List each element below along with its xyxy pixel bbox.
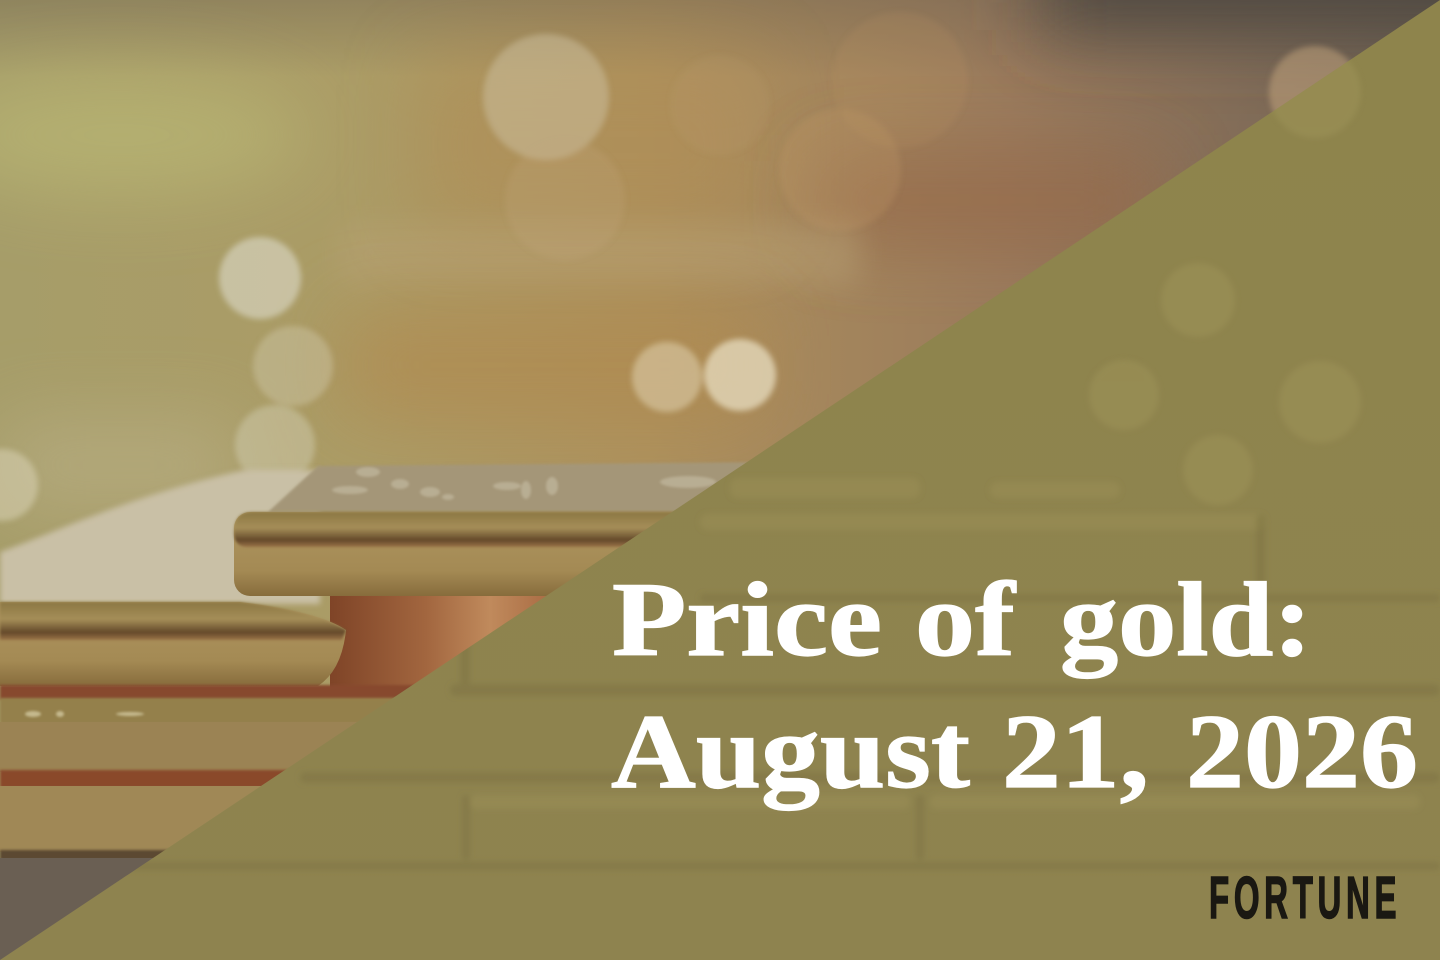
table foreground <box>0 858 320 960</box>
ghosted bokeh <box>1096 72 1354 498</box>
title line 1 <box>612 561 1312 678</box>
top bar surface <box>268 462 780 512</box>
third bar rim <box>0 698 480 724</box>
top bar body <box>234 512 794 596</box>
bar shadow <box>0 850 400 860</box>
ghosted bars <box>304 534 1436 780</box>
title line 1: Price <box>612 561 882 678</box>
red band 2 <box>0 770 400 788</box>
red band 1 <box>0 685 480 700</box>
title line 1: of <box>915 561 1017 678</box>
title line 2 <box>611 693 1418 810</box>
logo: FORTUNE: FORTUNE <box>1209 866 1397 932</box>
dusty surface left <box>0 470 320 604</box>
fourth bar front <box>0 786 400 852</box>
ghosted photo under overlay <box>304 72 1436 780</box>
title <box>611 561 1418 810</box>
reflection gap <box>330 592 650 692</box>
third bar front <box>0 722 480 772</box>
title line 2: 2026 <box>1186 693 1418 810</box>
speckled bar engraving <box>332 467 716 500</box>
second bar rim <box>0 602 346 640</box>
top bar rim <box>234 512 790 547</box>
bokeh light circles <box>0 12 1361 521</box>
title line 1: gold: <box>1060 561 1312 678</box>
second bar body <box>0 602 346 686</box>
title line 2: August <box>611 693 970 810</box>
title line 2: 21, <box>1002 693 1149 810</box>
gold bars stack <box>0 462 794 960</box>
